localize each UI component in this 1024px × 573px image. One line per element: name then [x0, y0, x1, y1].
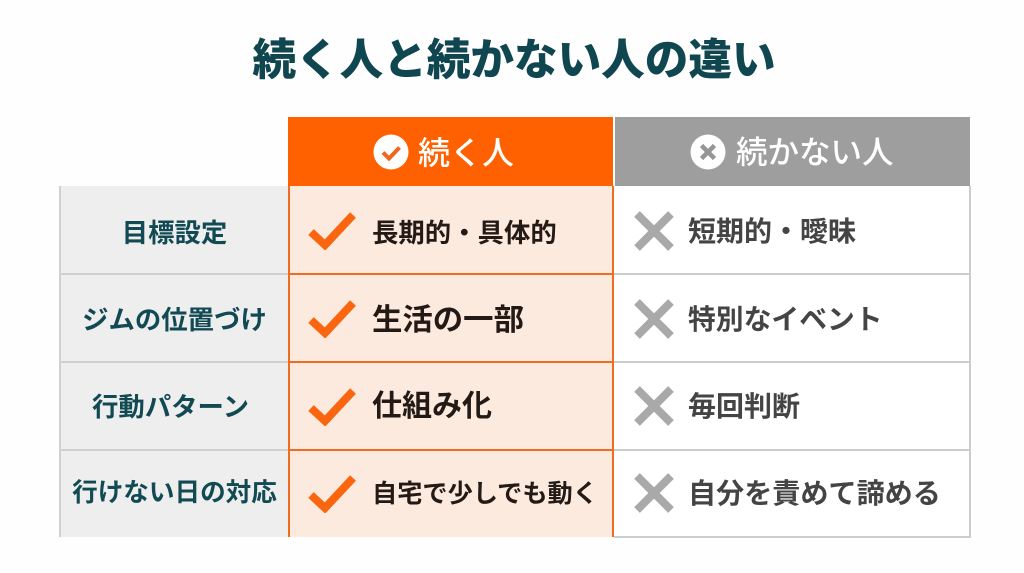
- row 3 continuing cell: [288, 363, 614, 451]
- row label: missed day response: 行けない日の対応: [72, 479, 277, 507]
- row 1 non-continuing cell: [614, 186, 971, 275]
- icon: cross: [634, 473, 674, 513]
- row label: behaviour pattern: 行動パターン: [92, 392, 249, 422]
- icon: check: [308, 212, 356, 250]
- row 4 non-continuing cell: 自分を責めて諦める: [688, 478, 941, 509]
- icon: cross: [634, 211, 674, 251]
- row 1 continuing cell: [288, 186, 614, 275]
- row label: missed day response: [59, 451, 288, 537]
- header: non-continuing people: [615, 117, 970, 186]
- row 2 non-continuing cell: 特別なイベント: [688, 304, 883, 335]
- row 1 non-continuing cell: 短期的・曖昧: [688, 216, 856, 247]
- icon: cross: [634, 299, 674, 339]
- row label: behaviour pattern: [59, 363, 288, 451]
- icon: cross: [634, 386, 674, 426]
- row 2 continuing cell: [288, 275, 614, 363]
- row 2 non-continuing cell: [614, 275, 971, 363]
- row 3 continuing cell: 仕組み化: [372, 390, 492, 423]
- row 4 non-continuing cell: [614, 451, 971, 538]
- icon: check: [308, 300, 356, 338]
- icon: cross circle: [690, 134, 726, 170]
- row 3 non-continuing cell: [614, 363, 971, 451]
- row 2 continuing cell: 生活の一部: [372, 303, 524, 337]
- row 4 continuing cell: [288, 451, 614, 537]
- row label: gym positioning: [59, 275, 288, 363]
- header: continuing people: [288, 117, 613, 186]
- icon: check: [308, 475, 356, 513]
- row 3 non-continuing cell: 毎回判断: [688, 391, 800, 422]
- icon: check circle: [374, 134, 408, 170]
- title: 続く人と続かない人の違い: [252, 37, 776, 85]
- row label: gym positioning: ジムの位置づけ: [82, 305, 267, 335]
- header text: 続く人: [418, 135, 514, 171]
- header text: 続かない人: [736, 134, 894, 170]
- row 1 continuing cell: 長期的・具体的: [372, 218, 557, 248]
- row label: goal setting: [59, 186, 288, 275]
- icon: check: [308, 388, 356, 426]
- row label: goal setting: 目標設定: [122, 218, 227, 248]
- row 4 continuing cell: 自宅で少しでも動く: [372, 480, 598, 508]
